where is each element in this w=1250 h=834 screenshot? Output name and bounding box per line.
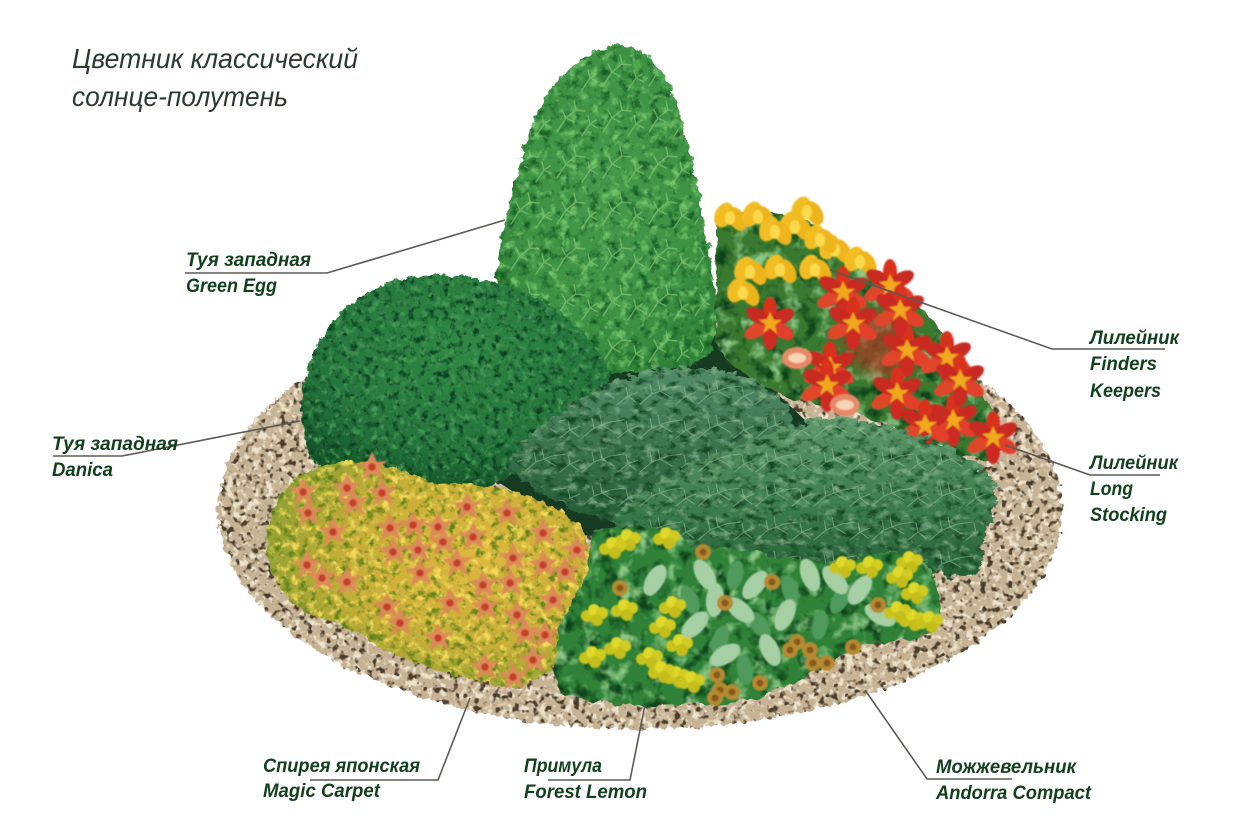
label: lily Long Stocking: Stocking: [1090, 505, 1167, 526]
label: thuja Green Egg: Green Egg: [186, 276, 277, 297]
plant: lilies Finders Keepers and Long Stocking: [710, 193, 1020, 464]
label: juniper Andorra Compact: Andorra Compact: [935, 783, 1092, 804]
label: juniper Andorra Compact: [865, 690, 1092, 804]
label: thuja Danica: Туя западная: [52, 434, 178, 455]
label: spirea Magic Carpet: Спирея японская: [263, 756, 420, 777]
title: солнце-полутень: [72, 81, 288, 112]
garden bed illustration: [218, 46, 1062, 729]
plant: thuja Danica: [302, 275, 610, 492]
plant: spirea Magic Carpet: [267, 452, 604, 690]
label: lily Finders Keepers: Finders: [1090, 354, 1157, 375]
plant: juniper Andorra Compact: [505, 367, 997, 576]
plant: thuja Green Egg: [496, 46, 717, 373]
label: lily Long Stocking: [1005, 445, 1179, 526]
label: lily Long Stocking: Long: [1090, 479, 1133, 500]
title: Цветник классический: [72, 43, 358, 74]
label: lily Finders Keepers: [830, 270, 1180, 402]
label: thuja Green Egg: [185, 220, 505, 297]
label: thuja Green Egg: Туя западная: [186, 250, 311, 271]
label: primula Forest Lemon: [524, 705, 647, 803]
label: lily Finders Keepers: Keepers: [1090, 381, 1161, 402]
label: thuja Danica: Danica: [52, 460, 113, 481]
label: primula Forest Lemon: Forest Lemon: [524, 782, 647, 803]
label: primula Forest Lemon: Примула: [524, 756, 602, 777]
label: spirea Magic Carpet: Magic Carpet: [263, 781, 381, 802]
label: thuja Danica: [52, 421, 300, 481]
label: spirea Magic Carpet: [263, 698, 470, 802]
plant: primula Forest Lemon: [556, 526, 943, 706]
label: lily Finders Keepers: Лилейник: [1088, 328, 1180, 349]
gravel base: [218, 291, 1062, 729]
shadow under plants: [495, 335, 810, 540]
label: juniper Andorra Compact: Можжевельник: [936, 757, 1077, 778]
label: lily Long Stocking: Лилейник: [1088, 453, 1179, 474]
title: [72, 43, 358, 112]
